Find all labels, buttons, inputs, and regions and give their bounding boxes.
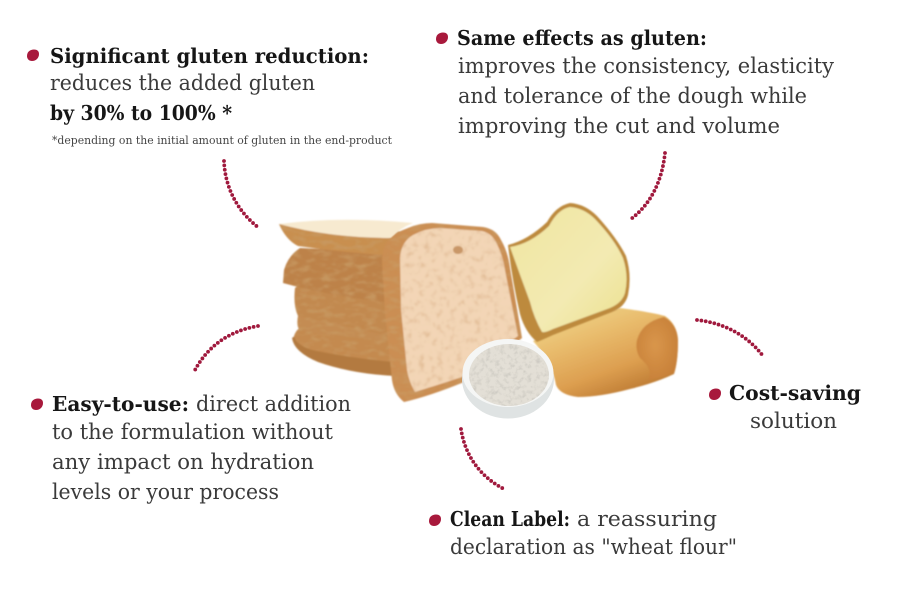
footnote: *depending on the initial amount of gluten in the end-product [52, 134, 393, 147]
description line 3: any impact on hydration [52, 450, 314, 474]
text block: easy-to-use [31, 392, 351, 504]
description line 2: and tolerance of the dough while [458, 84, 807, 108]
bullet: clean label [429, 514, 441, 526]
bullet: significant gluten reduction [27, 50, 39, 61]
dotted arc: easy-to-use to bread [195, 326, 258, 370]
text block: clean label [429, 507, 737, 559]
heading: clean label: Clean Label: [450, 507, 570, 531]
description line 2: declaration as "wheat flour" [450, 535, 737, 559]
dotted arc: same effects to bread [631, 153, 665, 219]
front bread slice [382, 223, 522, 402]
dotted arc: gluten reduction to bread [224, 161, 259, 228]
heading: cost-saving: Cost-saving [729, 381, 861, 405]
description: direct addition: direct addition [196, 392, 351, 416]
roll crust end [636, 317, 678, 380]
description: solution: solution [750, 409, 837, 433]
sliced bread stack [279, 220, 413, 376]
yellow roll: upper half [508, 203, 630, 342]
text block: cost-saving [709, 381, 861, 433]
description: a reassuring: a reassuring [577, 507, 717, 531]
description line 2: to the formulation without [52, 420, 334, 444]
illustration: bread and flour [279, 203, 678, 418]
yellow roll: lower half [533, 308, 678, 397]
heading: significant gluten reduction: Significant gluten reduction: [50, 44, 369, 68]
description: reduces the added gluten: reduces the added gluten [50, 71, 315, 95]
heading: easy-to-use: Easy-to-use: [52, 392, 189, 416]
text block: significant gluten reduction [27, 44, 393, 147]
text block: same effects as gluten [436, 26, 834, 138]
flour bowl [462, 339, 554, 418]
bullet: easy-to-use [31, 398, 43, 410]
description: same effects: improves the consistency, elasticity [458, 54, 834, 78]
dotted arc: clean label to bread [461, 429, 506, 490]
emphasis: by 30% to 100%: by 30% to 100% * [50, 101, 232, 125]
heading: same effects as gluten: Same effects as gluten: [457, 26, 707, 50]
bullet: cost-saving [709, 388, 721, 400]
bullet: same effects [436, 32, 448, 44]
dotted arc: cost-saving to bread [697, 320, 763, 356]
crumb hole [453, 246, 463, 254]
description line 3: improving the cut and volume [458, 114, 780, 138]
description line 4: levels or your process [52, 480, 279, 504]
